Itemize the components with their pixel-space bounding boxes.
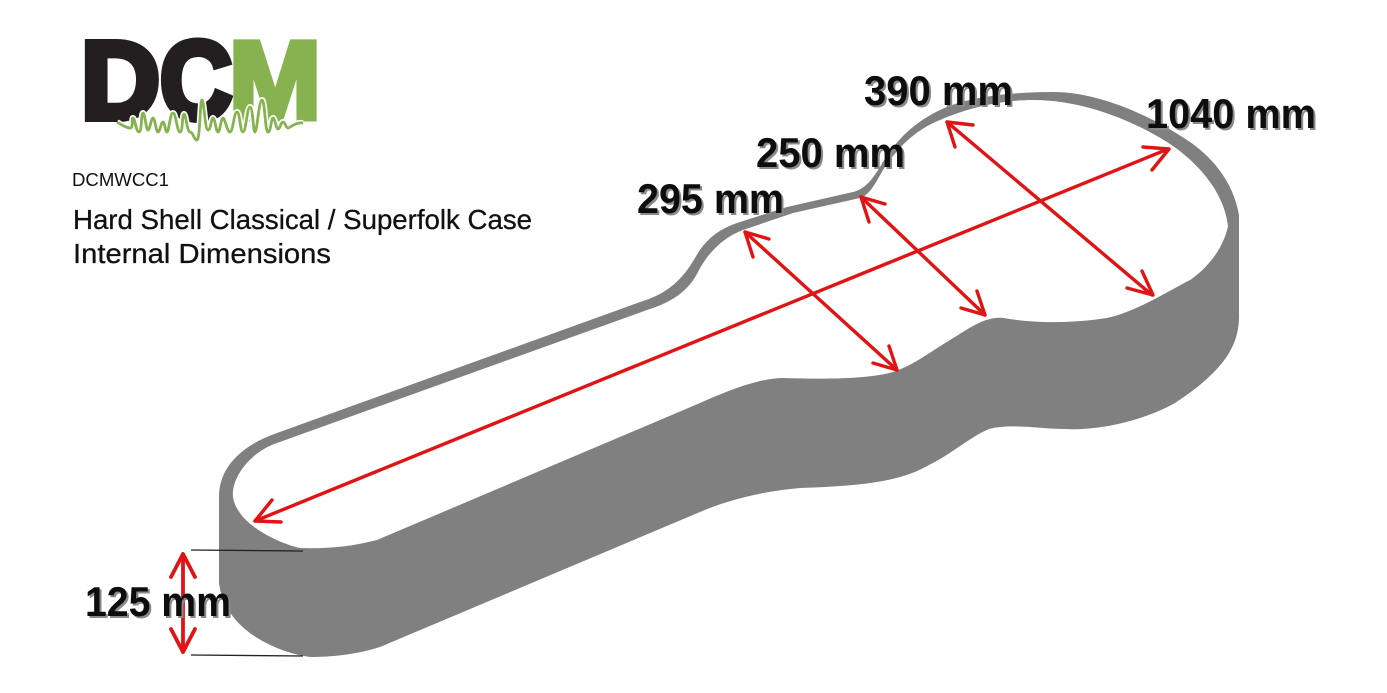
label: 125 mm: 125 mm bbox=[85, 578, 231, 625]
heading bbox=[73, 204, 532, 269]
heading: Internal Dimensions bbox=[73, 238, 331, 269]
heading: Hard Shell Classical / Superfolk Case bbox=[73, 204, 532, 235]
arrow: 125 mm height bbox=[171, 554, 195, 652]
guitar case body bbox=[219, 92, 1239, 657]
arrow: 250 mm width bbox=[861, 197, 985, 315]
logo: DCM: M bbox=[229, 20, 321, 142]
height guide lines bbox=[191, 550, 303, 656]
label: 250 mm: 250 mm bbox=[758, 131, 907, 178]
label: 1040 mm: 1040 mm bbox=[1148, 92, 1318, 139]
label: 250 mm: 250 mm bbox=[756, 129, 905, 176]
logo: DCM: D bbox=[81, 20, 160, 142]
case interior opening bbox=[233, 100, 1228, 548]
label: 390 mm: 390 mm bbox=[864, 67, 1013, 114]
product code: DCMWCC1 bbox=[72, 169, 169, 190]
label: 125 mm: 125 mm bbox=[87, 580, 233, 627]
arrow: 1040 mm length bbox=[255, 147, 1169, 522]
arrow: 390 mm width bbox=[947, 122, 1153, 295]
label: 295 mm: 295 mm bbox=[639, 177, 786, 224]
arrow: 295 mm width bbox=[745, 232, 897, 370]
label: 295 mm: 295 mm bbox=[637, 175, 784, 222]
logo: DCM: C bbox=[160, 20, 232, 142]
label: 390 mm: 390 mm bbox=[866, 69, 1015, 116]
logo: DCM bbox=[81, 20, 321, 142]
label: 1040 mm: 1040 mm bbox=[1146, 90, 1316, 137]
case outer shell bbox=[219, 92, 1239, 657]
